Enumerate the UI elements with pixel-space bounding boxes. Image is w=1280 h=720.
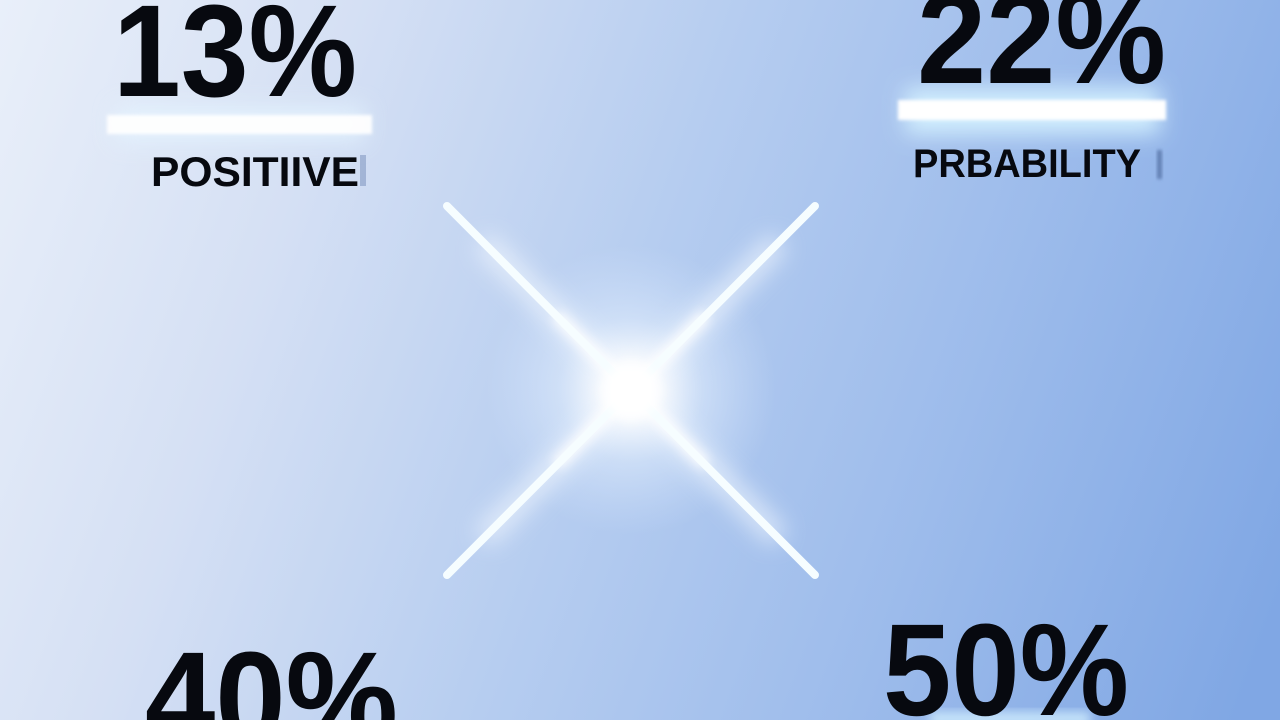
bright centre <box>603 363 659 419</box>
stat: 13% positive <box>107 0 372 195</box>
crossing lines <box>447 206 815 575</box>
glowing bar <box>107 106 372 142</box>
stat: 50% <box>883 596 1129 720</box>
glow under value <box>930 712 1090 720</box>
glow strokes <box>490 249 772 531</box>
label: PRBABILITY: PRBABILITY <box>913 142 1141 186</box>
stat: 22% probability <box>898 0 1166 186</box>
cursor mark <box>1157 150 1162 179</box>
inner glow strokes <box>560 319 702 461</box>
glowing X <box>447 206 815 575</box>
halo <box>486 245 776 535</box>
label: POSITIIVE: POSITIIVE <box>151 148 359 195</box>
label edge fade <box>360 155 366 186</box>
glowing bar <box>898 88 1166 134</box>
